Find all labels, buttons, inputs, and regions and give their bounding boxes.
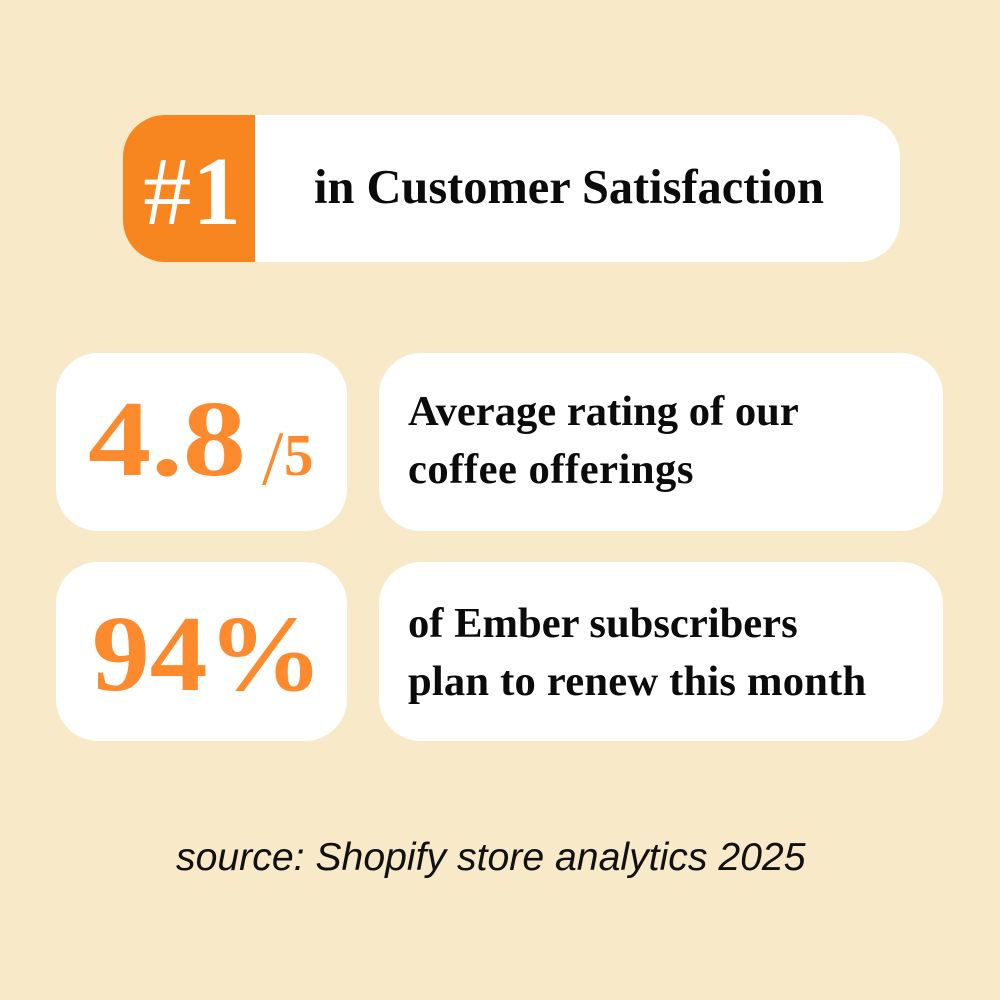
rating text (408, 388, 799, 492)
renewal text: plan to renew this month (408, 658, 866, 704)
renewal text: of Ember subscribers (408, 600, 798, 647)
panel: renewal value (56, 562, 347, 741)
banner text: in Customer Satisfaction (314, 161, 824, 214)
scale slash: / (262, 415, 283, 501)
panel: renewal description (379, 562, 943, 741)
rating number: 4.8 (88, 380, 246, 499)
scale five: 5 (284, 422, 314, 488)
banner: #1 in customer satisfaction (123, 115, 900, 262)
rating scale (262, 415, 314, 501)
renewal number: 94% (92, 595, 323, 714)
orange badge (123, 115, 255, 262)
rating text: Average rating of our (408, 388, 799, 435)
panel: rating description (379, 353, 943, 531)
source note: source: Shopify store analytics 2025 (176, 836, 806, 879)
rating text: coffee offerings (408, 446, 694, 492)
badge text: #1 (143, 138, 241, 245)
panel: rating value (56, 353, 347, 531)
renewal text (408, 600, 866, 704)
